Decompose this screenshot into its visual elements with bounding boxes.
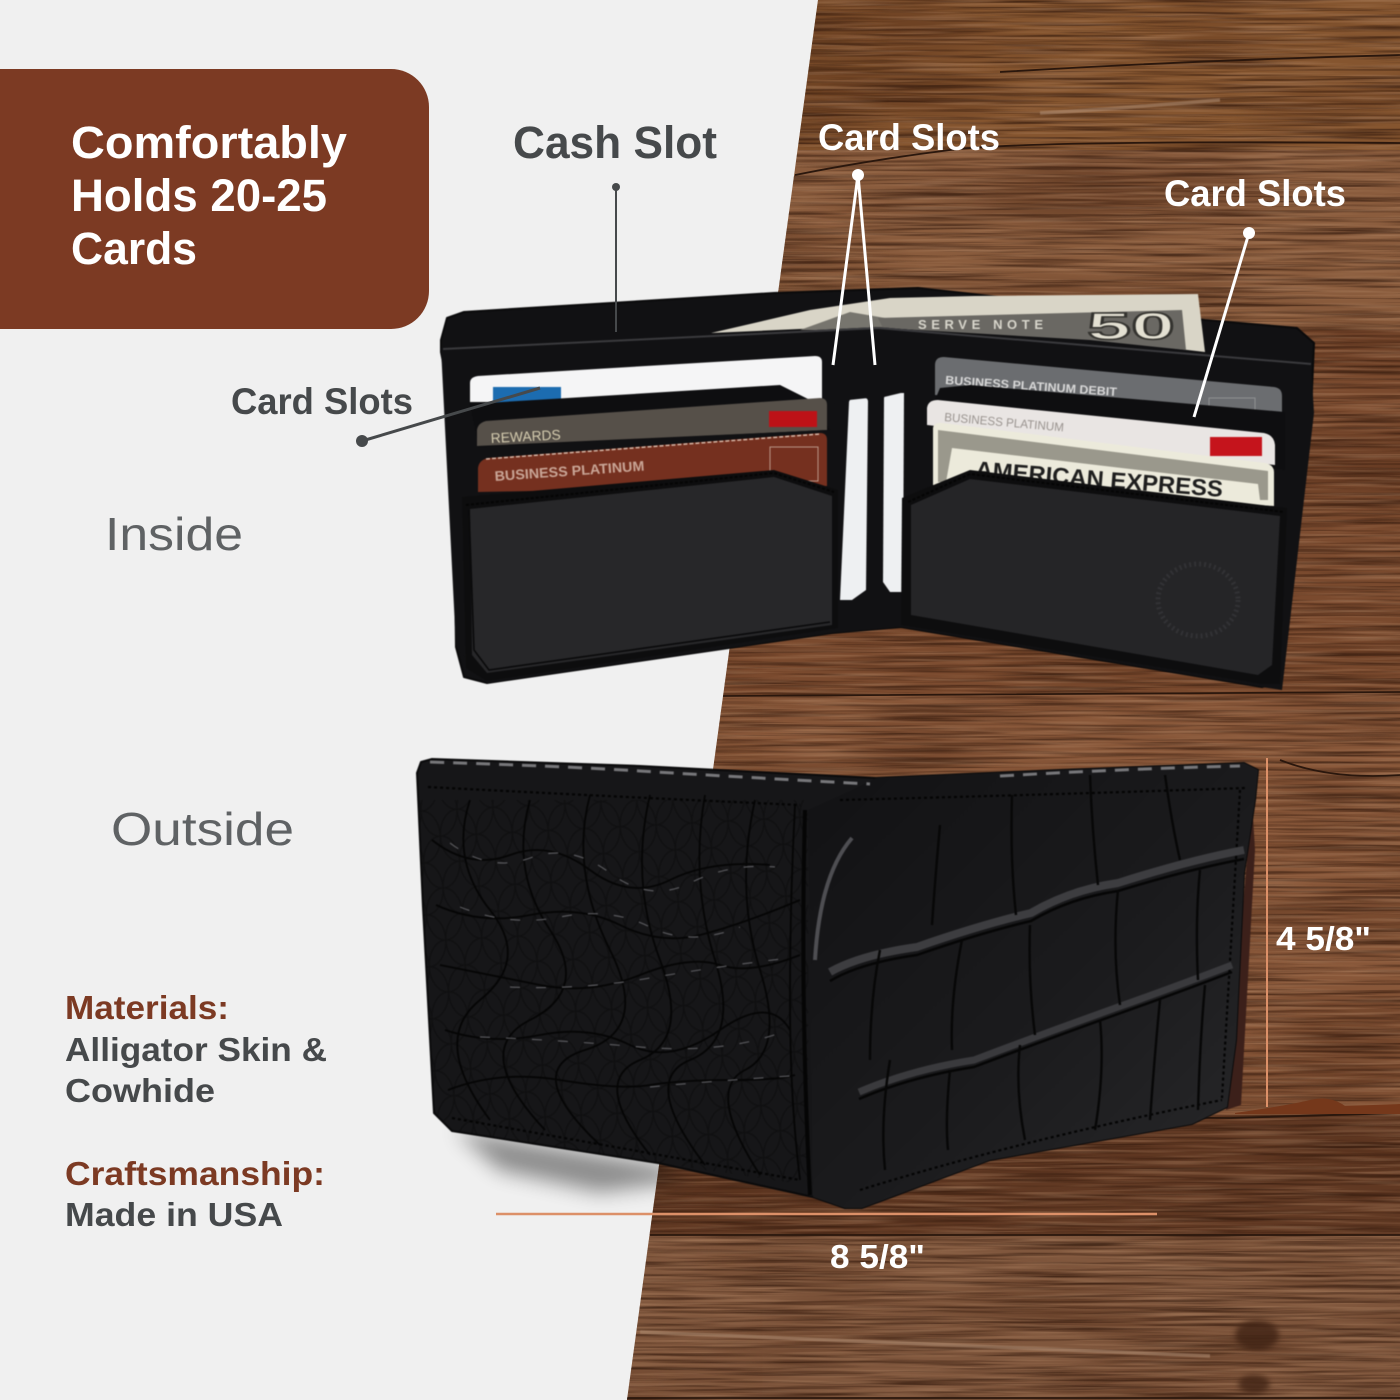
business platinum red card: BUSINESS PLATINUM [494, 458, 645, 484]
left white card [470, 356, 822, 402]
text block: materials: Materials: [65, 989, 229, 1026]
text block: craftsmanship: Craftsmanship: [65, 1155, 325, 1192]
callout: centre card slots: Card Slots [818, 117, 1000, 158]
stitching [428, 787, 1245, 1190]
callout: right card slots: Card Slots [1164, 173, 1346, 214]
wood knots [1235, 1320, 1279, 1393]
right front pocket [901, 470, 1287, 684]
inner front rim [441, 327, 1314, 690]
wallet outer shell [441, 288, 1314, 687]
gray debit card: BUSINESS PLATINUM DEBIT [945, 373, 1118, 399]
text block: materials: Alligator Skin & [65, 1031, 327, 1068]
white card with red logo [927, 400, 1275, 465]
left small scales [432, 795, 801, 1180]
banknote in cash slot: SERVE NOTE [918, 317, 1043, 332]
callout: centre card slots [818, 117, 1000, 365]
centre strip windows [840, 393, 904, 600]
dark pocket behind right cards [930, 385, 1285, 470]
callout: left card slots [231, 381, 540, 447]
american express bill card [933, 423, 1274, 506]
banknote in cash slot: 50 [1087, 306, 1175, 348]
large scale ridges [830, 850, 1244, 1099]
title banner: Cards [71, 223, 197, 274]
white card with red logo: BUSINESS PLATINUM [944, 410, 1065, 434]
rewards card [477, 398, 827, 446]
centre rim above windows [822, 340, 935, 405]
text block: craftsmanship [65, 1155, 325, 1233]
right smooth panel [808, 763, 1258, 1208]
brown edge [1226, 800, 1255, 1110]
callout: right card slots [1164, 173, 1346, 417]
background: wood planks panel [600, 0, 1400, 1400]
title banner [0, 69, 429, 329]
dark pocket behind left cards [470, 385, 830, 448]
top edge highlights [430, 762, 1240, 784]
callout: cash slot: Cash Slot [513, 117, 717, 168]
leather body [417, 759, 1258, 1208]
cast shadow [455, 1130, 690, 1192]
business platinum red card [478, 433, 827, 492]
title banner: Holds 20-25 [71, 170, 327, 221]
american express bill card: AMERICAN EXPRESS [975, 456, 1224, 502]
orange stain at seam [1235, 1098, 1400, 1114]
gap between left cards [477, 430, 827, 462]
plank seams and cracks [627, 55, 1400, 1398]
title banner: Comfortably [71, 117, 347, 168]
callout: left card slots: Card Slots [231, 381, 413, 422]
dimension: height: 4 5/8" [1276, 920, 1371, 957]
wallet: open inside view [441, 288, 1314, 690]
large scale dividers [870, 775, 1205, 1170]
rewards card: REWARDS [490, 426, 561, 446]
label: outside: Outside [111, 803, 294, 855]
callout: cash slot [513, 117, 717, 332]
blue logo [493, 387, 561, 404]
text block: materials: Cowhide [65, 1072, 215, 1109]
left front pocket [462, 470, 838, 681]
wallet: outside alligator view [410, 759, 1258, 1208]
label: inside: Inside [105, 508, 243, 560]
gray debit card [935, 357, 1282, 416]
text block: craftsmanship: Made in USA [65, 1196, 283, 1233]
text block: materials [65, 989, 327, 1109]
light streaks [640, 100, 1220, 1356]
dimension: width: 8 5/8" [830, 1238, 925, 1275]
spine crease [803, 810, 810, 1195]
banknote in cash slot [711, 294, 1205, 352]
